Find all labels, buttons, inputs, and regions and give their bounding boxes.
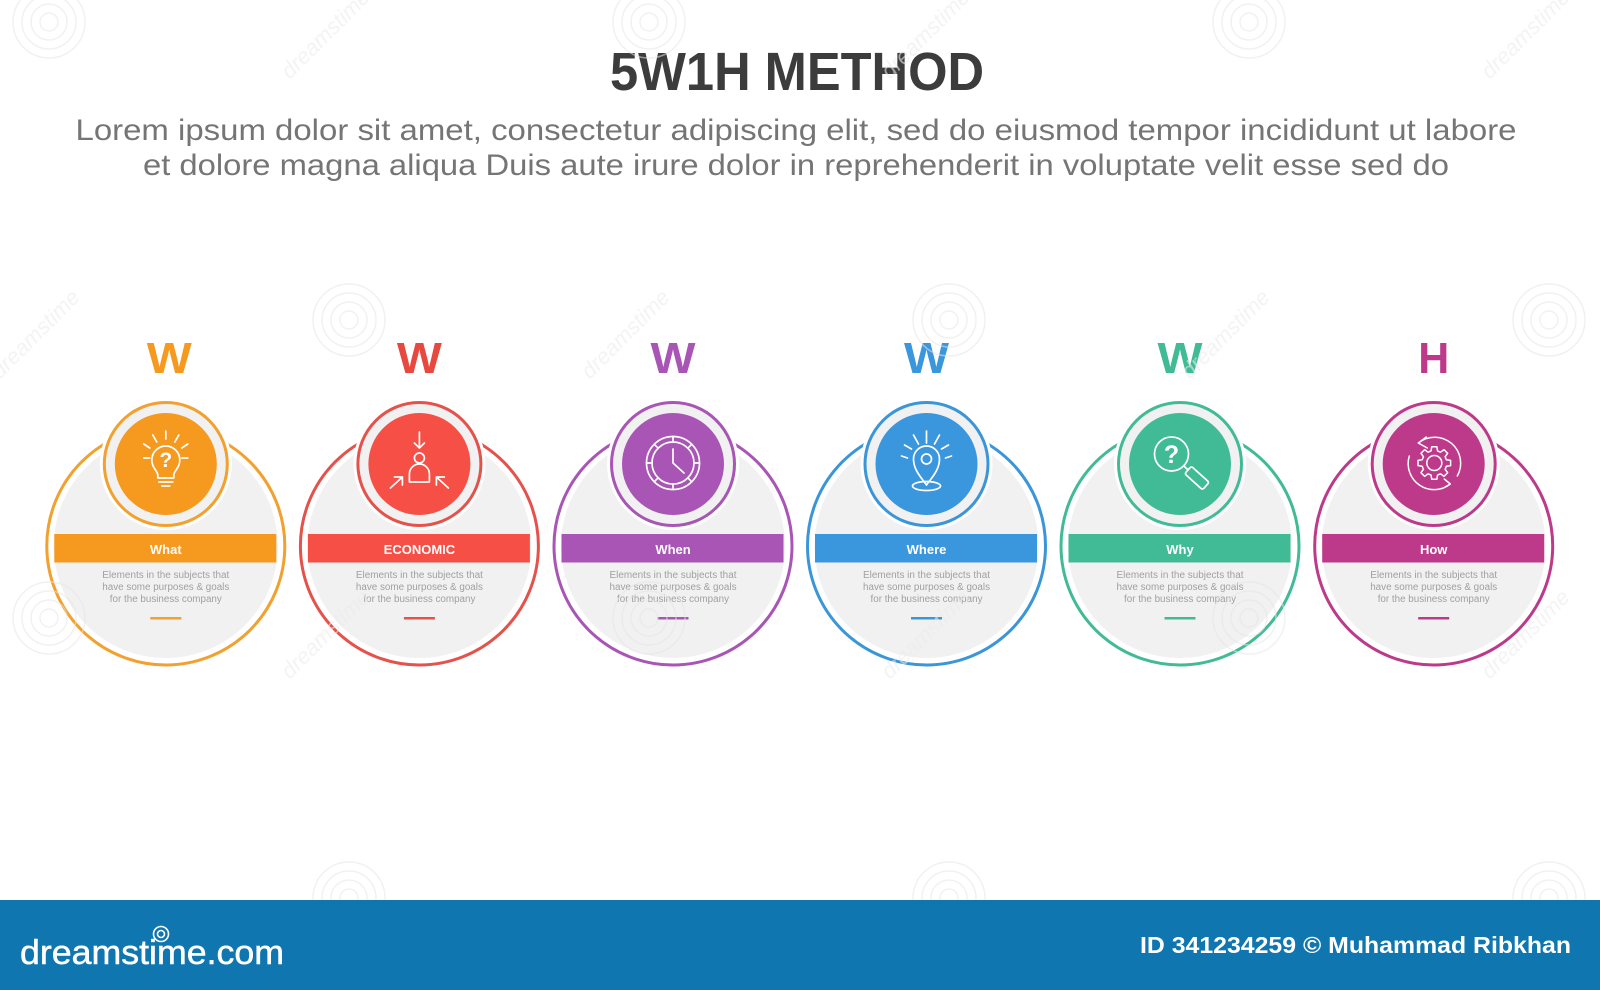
dash (1418, 617, 1449, 620)
badge circle (1114, 398, 1246, 530)
bar label: What (150, 542, 182, 557)
header bar (54, 534, 276, 562)
description: for the business company (363, 594, 475, 605)
description: for the business company (1378, 594, 1490, 605)
panel: how (1315, 334, 1553, 665)
description: have some purposes & goals (1370, 582, 1497, 593)
header bar (1068, 534, 1290, 562)
icon: person with arrows (390, 432, 448, 488)
panel: where (808, 334, 1046, 665)
description: Elements in the subjects that (1116, 570, 1244, 581)
description: have some purposes & goals (102, 582, 229, 593)
footer credit: ID 341234259 © Muhammad Ribkhan (1140, 932, 1571, 958)
icon: gear with rotating arrows (1408, 437, 1461, 490)
large circle (300, 427, 538, 665)
header bar (308, 534, 530, 562)
description: have some purposes & goals (356, 582, 483, 593)
letter W: W (650, 334, 696, 383)
description: Elements in the subjects that (102, 570, 230, 581)
description: Elements in the subjects that (863, 570, 990, 581)
description: Elements in the subjects that (610, 570, 737, 581)
dash (911, 617, 942, 620)
watermark text: dreamstime (276, 585, 375, 684)
badge circle (353, 398, 485, 530)
panel: why (1061, 334, 1299, 665)
description: Elements in the subjects that (1370, 570, 1497, 581)
description (1370, 570, 1497, 605)
large circle (1061, 427, 1299, 665)
badge circle (100, 398, 232, 530)
description: for the business company (617, 594, 729, 605)
description (356, 570, 483, 605)
panel: economic (300, 334, 538, 665)
icon: location pin (902, 431, 952, 490)
bar label: ECONOMIC (384, 542, 456, 557)
subtitle text block: Lorem ipsum dolor sit amet, consectetur adipiscing elit, sed do eiusmod tempor incididunt ut labore (76, 114, 1516, 147)
description: have some purposes & goals (863, 582, 990, 593)
letter W: W (147, 334, 192, 383)
footer band (0, 900, 1600, 990)
badge circle (1368, 398, 1500, 530)
header bar (1322, 534, 1544, 562)
large circle (47, 427, 285, 665)
icon: magnifier question: ? (1164, 441, 1179, 469)
dash (404, 617, 435, 620)
panel: when (554, 334, 792, 665)
bar label: Where (907, 542, 946, 557)
title: 5W1H METHOD (610, 42, 984, 102)
watermark text: dreamstime (576, 285, 675, 384)
dash (658, 617, 688, 620)
watermark text: dreamstime (1176, 285, 1275, 384)
footer logo: dreamstime.com (20, 934, 284, 972)
icon: light bulb question (144, 431, 188, 486)
dash (150, 617, 181, 620)
badge circle (607, 398, 739, 530)
description: have some purposes & goals (610, 582, 736, 593)
bar label: How (1420, 542, 1448, 557)
description: for the business company (110, 594, 222, 605)
description (102, 570, 230, 605)
watermark text (0, 0, 1575, 684)
panel: what (47, 334, 285, 665)
icon: magnifier question (1154, 437, 1209, 490)
subtitle text block: et dolore magna aliqua Duis aute irure dolor in reprehenderit in voluptate velit esse sed do (143, 149, 1449, 182)
bar label: When (655, 542, 691, 557)
large circle (554, 427, 792, 665)
large circle (808, 427, 1046, 665)
description (610, 570, 737, 605)
large circle (1315, 427, 1553, 665)
letter W: W (1158, 334, 1203, 383)
badge circle (860, 398, 992, 530)
icon: clock (646, 436, 700, 490)
description: have some purposes & goals (1116, 582, 1244, 593)
description (863, 570, 990, 605)
header bar (815, 534, 1037, 562)
description: for the business company (870, 594, 982, 605)
watermark text: dreamstime (1476, 585, 1575, 684)
dash (1164, 617, 1196, 620)
description: Elements in the subjects that (356, 570, 483, 581)
bar label: Why (1166, 542, 1194, 557)
watermark text: dreamstime (876, 585, 975, 684)
letter H: H (1418, 334, 1449, 383)
icon: light bulb question: ? (159, 449, 172, 472)
letter W: W (904, 334, 950, 383)
header bar (562, 534, 784, 562)
description (1116, 570, 1244, 605)
letter W: W (397, 334, 442, 383)
subtitle text block (76, 114, 1516, 182)
description: for the business company (1124, 594, 1236, 605)
